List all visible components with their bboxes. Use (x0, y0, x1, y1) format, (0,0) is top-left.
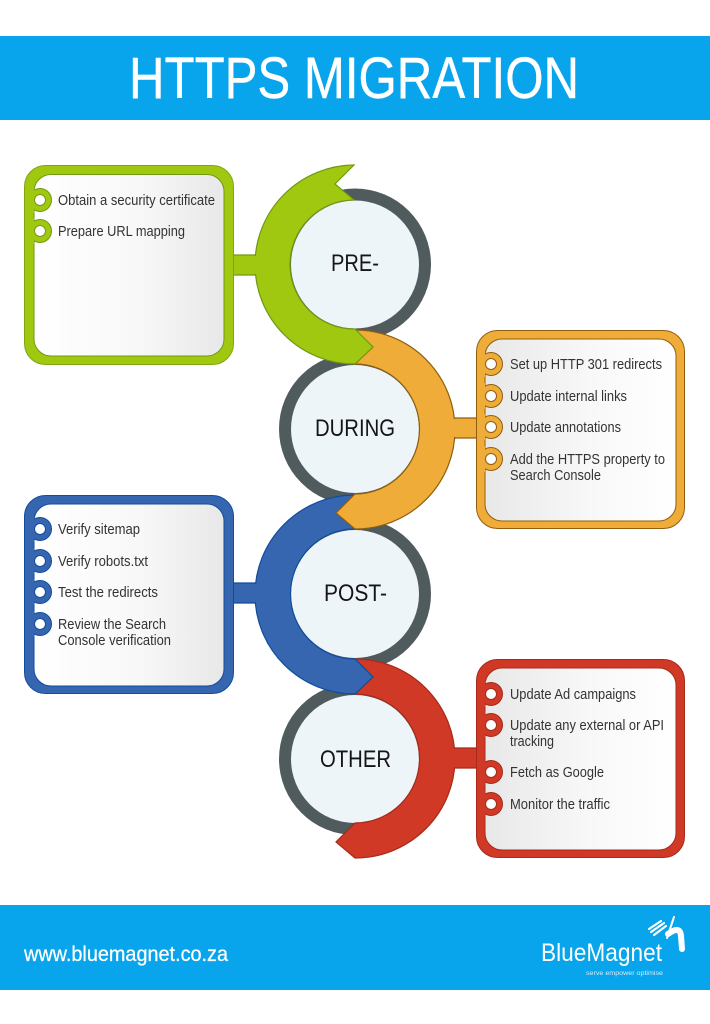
label: DURING: DURING (315, 415, 395, 442)
logo: BlueMagnet: BlueMagnet (541, 939, 662, 967)
label: PRE-: PRE- (331, 250, 379, 277)
list text: Review the Search (58, 616, 166, 633)
circle: post (279, 518, 431, 670)
label: OTHER: OTHER (320, 746, 391, 773)
list text (510, 356, 665, 484)
list text: Add the HTTPS property to (510, 451, 665, 468)
logo: BlueMagnet (541, 917, 682, 977)
panel: other (476, 660, 684, 858)
footer banner (0, 905, 710, 990)
list text (58, 192, 215, 240)
circle: pre (279, 188, 431, 340)
bullet rings (27, 516, 52, 637)
circle: during (279, 353, 431, 505)
list text: Console verification (58, 632, 171, 649)
list text: Update annotations (510, 419, 621, 436)
list text: Monitor the traffic (510, 796, 610, 813)
panel: pre (24, 166, 234, 364)
crescent: post (blue) (233, 495, 373, 694)
circle: other (279, 683, 431, 835)
panel: during (476, 330, 684, 528)
list text: Set up HTTP 301 redirects (510, 356, 662, 373)
panel: post (24, 496, 234, 694)
list text: Fetch as Google (510, 764, 604, 781)
list text: Update internal links (510, 388, 627, 405)
title: HTTPS MIGRATION (129, 46, 579, 111)
list text: Verify robots.txt (58, 553, 149, 570)
bullet rings (478, 351, 502, 472)
logo: BlueMagnet: serve empower optimise (586, 971, 664, 977)
list text: Prepare URL mapping (58, 223, 185, 240)
list text (510, 686, 664, 813)
list text: tracking (510, 733, 554, 750)
label: POST-: POST- (324, 580, 387, 607)
crescent: pre (green) (233, 165, 373, 364)
crescent: other (red) (336, 659, 478, 858)
list text: Update Ad campaigns (510, 686, 636, 703)
list text: Test the redirects (58, 584, 158, 601)
list text: Obtain a security certificate (58, 192, 215, 209)
bullet rings (478, 681, 502, 817)
list text: Verify sitemap (58, 521, 140, 538)
bullet rings (27, 187, 52, 244)
crescent: during (orange) (336, 330, 478, 529)
list text: Search Console (510, 467, 601, 484)
header banner (0, 36, 710, 120)
list text: Update any external or API (510, 717, 664, 734)
icon: magnet mark (649, 917, 682, 949)
website url: www.bluemagnet.co.za (23, 943, 228, 966)
list text (58, 521, 171, 649)
